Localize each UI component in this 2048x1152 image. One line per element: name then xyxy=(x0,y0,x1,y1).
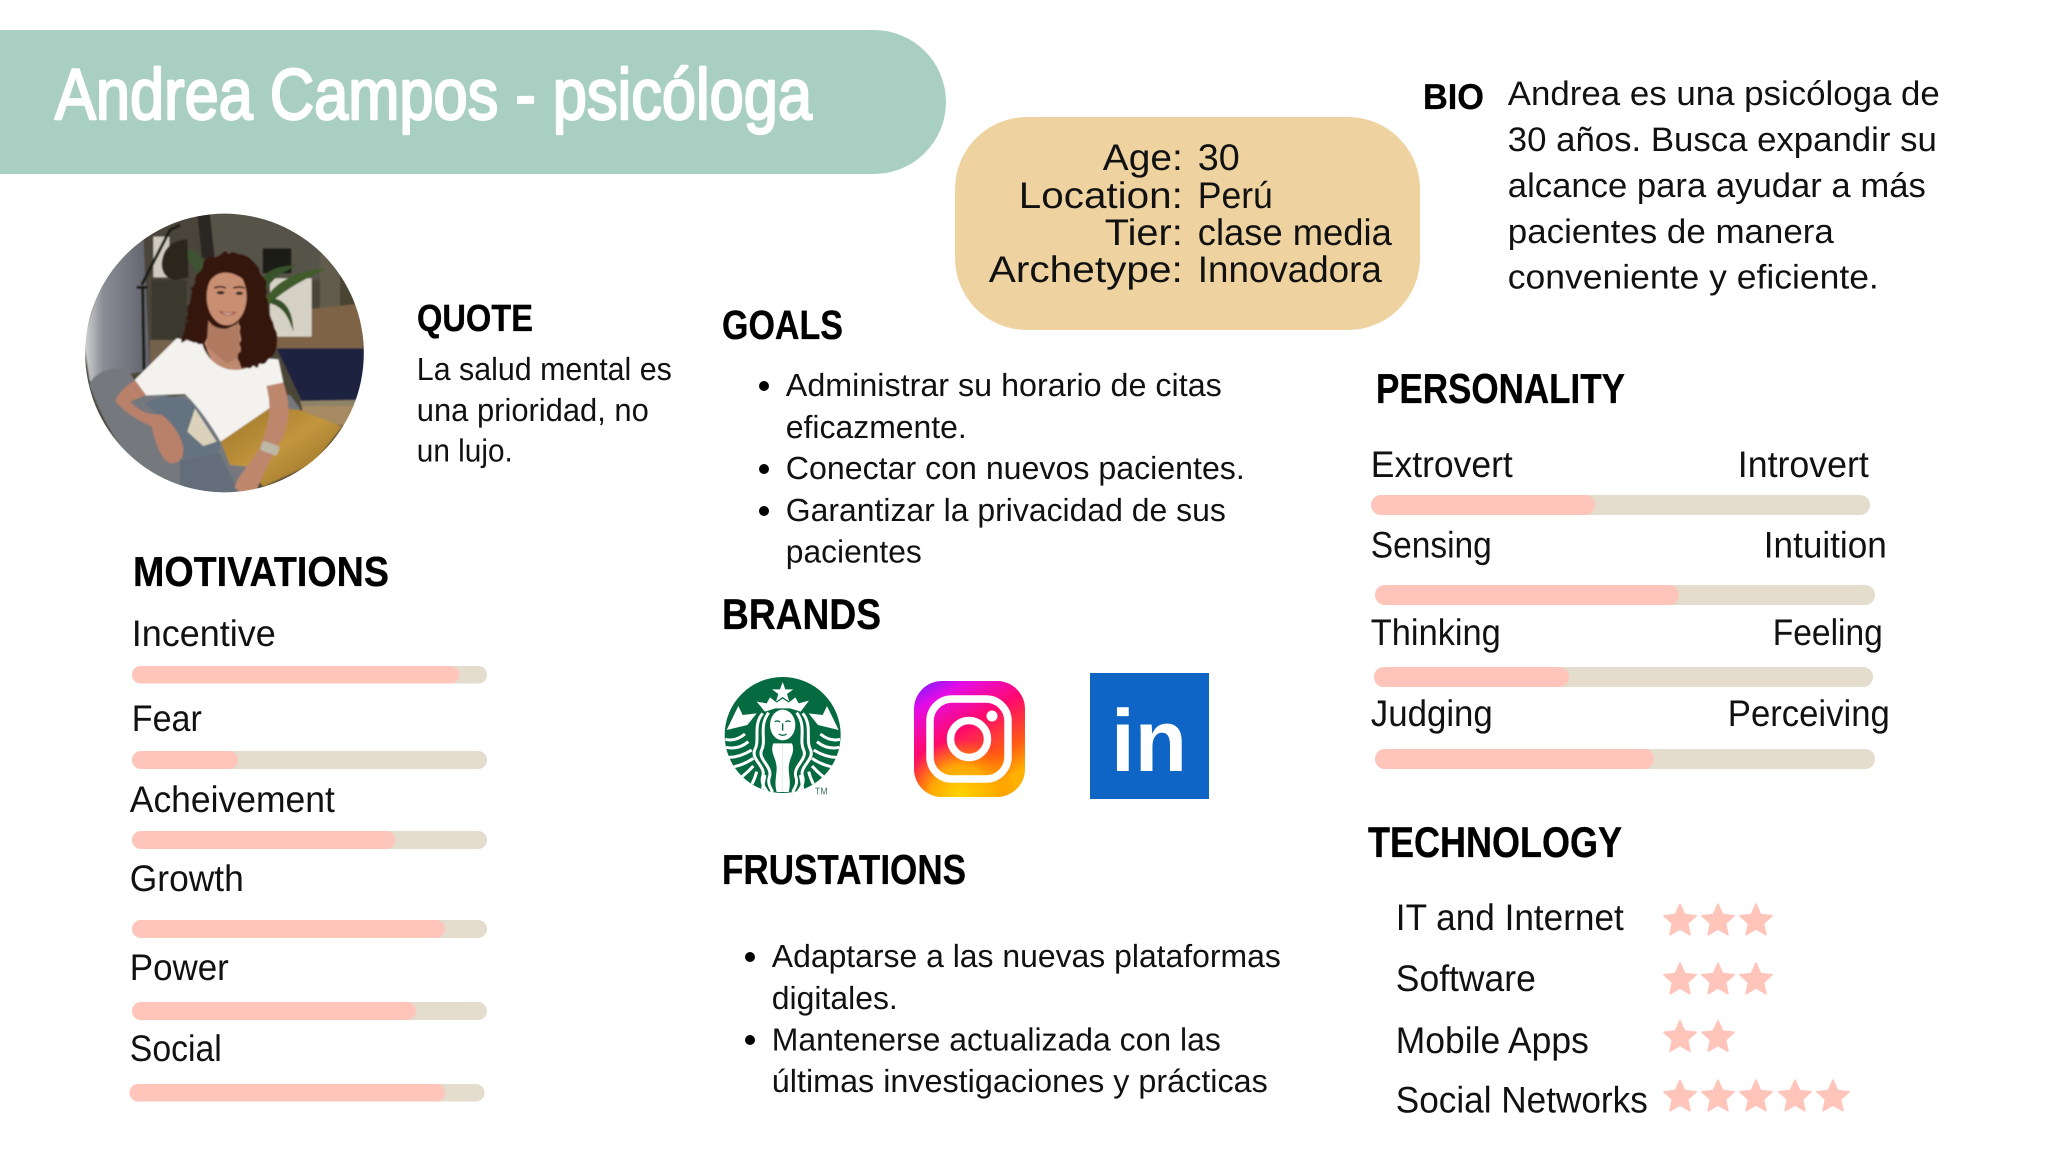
goals: GOALS xyxy=(722,302,843,348)
row: Mobile Apps: Mobile Apps xyxy=(1396,1020,1589,1061)
motivations: Growth xyxy=(130,858,244,899)
row: Software xyxy=(1396,958,1772,999)
personality: Sensing xyxy=(1371,524,1492,566)
info card: age, location, tier, archetype: Age: xyxy=(1103,137,1183,178)
personality: Feeling xyxy=(1773,612,1883,653)
goals: Administrar su horario de citas xyxy=(786,367,1222,403)
logo: Starbucks xyxy=(725,677,841,797)
bio: conveniente y eficiente. xyxy=(1508,258,1879,296)
title: Andrea Campos - psicóloga xyxy=(55,55,813,135)
frustrations xyxy=(722,846,1281,1099)
frustrations: digitales. xyxy=(772,980,898,1016)
info card: age, location, tier, archetype xyxy=(955,117,1420,330)
quote: una prioridad, no xyxy=(417,392,649,428)
personality: Extrovert xyxy=(1371,444,1513,485)
row: IT and Internet: IT and Internet xyxy=(1396,897,1624,938)
personality: Perceiving xyxy=(1728,693,1890,734)
motivations: Power xyxy=(130,947,229,988)
bio: BIO xyxy=(1423,76,1484,117)
title banner xyxy=(0,30,946,174)
personality: Thinking xyxy=(1371,612,1501,653)
logo: LinkedIn xyxy=(1090,673,1209,799)
info card: age, location, tier, archetype: Innovadora xyxy=(1198,249,1382,290)
goals: Garantizar la privacidad de sus xyxy=(786,492,1226,528)
motivations: Social xyxy=(130,1028,222,1069)
motivations: Acheivement xyxy=(130,779,335,820)
motivations: MOTIVATIONS xyxy=(133,548,389,595)
technology xyxy=(1368,819,1849,1120)
goals: pacientes xyxy=(786,534,922,570)
bio: pacientes de manera xyxy=(1508,213,1834,251)
quote: QUOTE xyxy=(417,298,533,340)
bio: alcance para ayudar a más xyxy=(1508,167,1926,205)
row: IT and Internet xyxy=(1396,897,1772,938)
logo: Instagram xyxy=(914,681,1025,797)
bio xyxy=(1423,75,1940,296)
info card: age, location, tier, archetype: 30 xyxy=(1198,137,1240,178)
goals: eficazmente. xyxy=(786,409,967,445)
logo: Starbucks: TM xyxy=(815,786,828,797)
personality xyxy=(1371,365,1890,769)
motivations xyxy=(130,548,487,1102)
personality: Intuition xyxy=(1764,524,1887,566)
goals xyxy=(722,302,1245,570)
motivations: Fear xyxy=(132,698,202,739)
bio: 30 años. Busca expandir su xyxy=(1508,121,1937,159)
info card: age, location, tier, archetype: clase media xyxy=(1198,212,1392,253)
logo: LinkedIn: in xyxy=(1111,691,1187,790)
quote: un lujo. xyxy=(417,432,513,468)
info card: age, location, tier, archetype: Location: xyxy=(1019,175,1183,216)
goals: Conectar con nuevos pacientes. xyxy=(786,450,1245,486)
row: Social Networks: Social Networks xyxy=(1396,1080,1648,1120)
motivations: Incentive xyxy=(132,613,276,654)
brands xyxy=(722,591,1209,799)
frustrations: Adaptarse a las nuevas plataformas xyxy=(772,938,1281,974)
personality: Introvert xyxy=(1738,444,1869,485)
quote xyxy=(417,298,672,468)
frustrations: FRUSTATIONS xyxy=(722,846,966,893)
info card: age, location, tier, archetype: Archetype: xyxy=(989,249,1183,290)
portrait photo illustration xyxy=(85,214,364,492)
bio: Andrea es una psicóloga de xyxy=(1508,75,1940,113)
personality: Judging xyxy=(1371,693,1493,734)
info card: age, location, tier, archetype: Perú xyxy=(1198,175,1273,216)
info card: age, location, tier, archetype: Tier: xyxy=(1105,212,1183,253)
frustrations: Mantenerse actualizada con las xyxy=(772,1022,1221,1058)
brands: BRANDS xyxy=(722,591,881,639)
row: Software: Software xyxy=(1396,958,1536,999)
row: Social Networks xyxy=(1396,1080,1849,1120)
technology: TECHNOLOGY xyxy=(1368,819,1622,867)
quote: La salud mental es xyxy=(417,351,672,387)
frustrations: últimas investigaciones y prácticas xyxy=(772,1063,1268,1099)
personality: PERSONALITY xyxy=(1376,365,1625,412)
row: Mobile Apps xyxy=(1396,1020,1734,1061)
